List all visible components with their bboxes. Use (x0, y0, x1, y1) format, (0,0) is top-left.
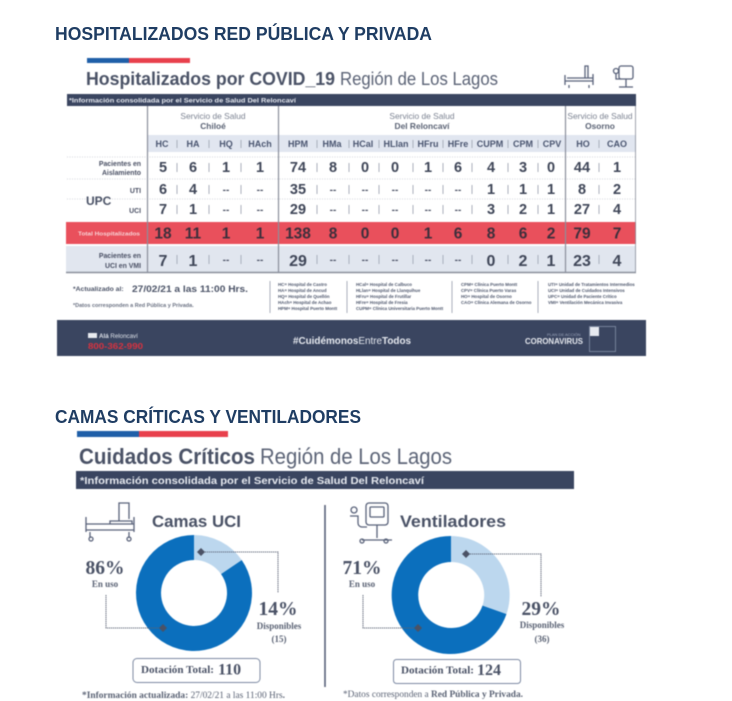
panel subtitle: Región de Los Lagos (260, 444, 452, 469)
legend: units (548, 282, 635, 305)
legend: clinics: CPM= Clínica Puerto Montt (461, 282, 518, 287)
panel subtitle: Región de Los Lagos (340, 68, 498, 89)
header band: HQ (219, 139, 233, 149)
vmi band: UCI en VMI (105, 263, 141, 270)
row: aislamiento values: 1 (613, 160, 621, 176)
total band (66, 222, 636, 244)
legend: units: UCI= Unidad de Cuidados Intensivos (548, 288, 625, 293)
column group headers: Servicio de Salud (180, 111, 246, 121)
legend: hospitals 2 (356, 282, 444, 311)
heading: camas UCI: Camas UCI (152, 512, 241, 531)
legend: hospitals 1: HPM= Hospital Puerto Montt (278, 306, 338, 311)
header band: HC (156, 139, 169, 149)
callout: 29% disponibles: (36) (534, 634, 550, 644)
footer band: 800-362-990 (88, 341, 143, 351)
legend: hospitals 2: CUPM= Clínica Universitaria Puerto Montt (356, 306, 444, 311)
row: VMI values: -- (425, 255, 431, 266)
row: UCI values: 4 (613, 202, 621, 218)
callout: 86% en uso (86, 558, 167, 632)
header band: CUPM (477, 139, 503, 149)
row: aislamiento values: 6 (454, 160, 462, 176)
row: UCI values: 1 (189, 202, 197, 218)
column separators (177, 140, 599, 264)
header band: CPV (543, 139, 561, 149)
vmi band: Pacientes en (99, 253, 141, 260)
callout: 14% disponibles: Disponibles (257, 621, 302, 631)
row labels (86, 161, 141, 215)
row: VMI values: 23 (573, 253, 591, 270)
total box: ventiladores: Dotación Total: (401, 664, 474, 676)
heading: hospitalizados: HOSPITALIZADOS RED PÚBLICA Y PRIVADA (55, 23, 432, 44)
row: aislamiento values: 8 (329, 160, 337, 176)
flag stripe (87, 58, 190, 63)
legend: clinics: CPV= Clínica Puerto Varas (461, 288, 517, 293)
info bar: *Información consolidada por el Servicio de Salud Del Reloncaví (80, 476, 425, 487)
legend: clinics: CAO= Clínica Alemana de Osorno (461, 300, 532, 305)
legend: hospitals 1: HQ= Hospital de Quellón (278, 294, 330, 299)
row: aislamiento values: 4 (487, 160, 495, 176)
legend: clinics (461, 282, 532, 305)
callout: 86% en uso: En uso (92, 579, 119, 589)
heading: camas criticas: CAMAS CRÍTICAS Y VENTILADORES (55, 406, 361, 427)
header band: HO (576, 139, 590, 149)
row: VMI values: -- (392, 255, 398, 266)
row: aislamiento values: 0 (391, 160, 399, 176)
footnote: actualizada: *Información actualizada: 27/02/21 a las 11:00 Hrs . (82, 690, 285, 700)
update note (73, 284, 248, 309)
update note: *Datos corresponden a Red Pública y Privada. (73, 303, 194, 309)
total band: Total Hospitalizados (78, 232, 140, 238)
legend: hospitals 1: HC= Hospital de Castro (278, 282, 327, 287)
row: aislamiento values: 6 (189, 160, 197, 176)
footer band: #CuidémonosEntreTodos (293, 336, 411, 347)
header band (148, 135, 636, 152)
legend: hospitals 1: HA= Hospital de Ancud (278, 288, 327, 293)
update note: 27/02/21 a las 11:00 Hrs. (132, 284, 248, 294)
row separators (67, 157, 636, 199)
footnote: datos: *Datos corresponden a Red Pública y Privada. (343, 689, 523, 699)
divider (324, 505, 326, 687)
legend: units: VMI= Ventilación Mecánica Invasiva (548, 300, 623, 305)
callout: 29% disponibles: Disponibles (520, 620, 565, 630)
donut chart: ventiladores (392, 536, 510, 654)
row: total values: 6 (454, 226, 463, 242)
footer band: PLAN DE ACCIÓN (547, 332, 581, 337)
row: UTI values: -- (455, 185, 461, 196)
row labels: UCI (129, 208, 141, 215)
legend: clinics: HO= Hospital de Osorno (461, 294, 512, 299)
header band: CAO (607, 139, 627, 149)
column group headers (180, 111, 633, 131)
row: VMI values: 29 (289, 253, 307, 270)
icon: ventilator (614, 66, 633, 87)
legend: hospitals 2: HFru= Hospital de Frutillar (356, 294, 412, 299)
callout: 14% disponibles: 14% (258, 599, 298, 620)
footer band (57, 320, 646, 356)
callout: 71% en uso: 71% (342, 558, 382, 579)
row: UTI values: 8 (578, 182, 586, 198)
footer band: Alá Reloncaví (99, 333, 138, 340)
row: total values: 8 (487, 226, 496, 242)
row: UCI values: -- (362, 205, 368, 216)
row: VMI values (159, 253, 622, 270)
header band: HPM (288, 139, 308, 149)
row: aislamiento values: 1 (256, 160, 264, 176)
row: VMI values: 1 (189, 253, 198, 270)
row: UTI values: 1 (547, 182, 555, 198)
row: aislamiento values: 44 (574, 160, 590, 176)
total box: camas (133, 658, 260, 682)
total box: camas: 110 (218, 662, 241, 678)
column group headers: Osorno (585, 121, 615, 131)
info bar (76, 471, 574, 489)
row: UCI values: 7 (159, 202, 167, 218)
callout: 14% disponibles (197, 548, 302, 644)
row: VMI values: 2 (519, 253, 528, 270)
row: aislamiento values: 0 (547, 160, 555, 176)
row: UCI values: 27 (574, 202, 590, 218)
row: VMI values: 4 (613, 253, 622, 270)
row: UCI values: 2 (519, 202, 527, 218)
row: UCI values: -- (392, 205, 398, 216)
header band: HCal (353, 139, 373, 149)
row: total values: 1 (222, 226, 231, 242)
callout: 29% disponibles: 29% (522, 599, 560, 620)
column group headers: Del Reloncaví (395, 121, 450, 131)
row: UCI values: 3 (487, 202, 495, 218)
row: UTI values: -- (362, 185, 368, 196)
row: total values: 0 (361, 226, 369, 242)
row: total values: 1 (256, 226, 265, 242)
header band: HLlan (383, 139, 409, 149)
callout: 71% en uso (342, 558, 422, 632)
row: VMI values: -- (362, 255, 368, 266)
row: aislamiento values: 5 (159, 160, 167, 176)
row: VMI values: -- (223, 255, 229, 266)
column group headers: Servicio de Salud (567, 111, 633, 121)
legend: hospitals 1: HAch= Hospital de Achao (278, 300, 332, 305)
row: UTI values: 2 (613, 182, 621, 198)
update note: *Actualizado al: (73, 286, 124, 293)
legend: hospitals 1 (278, 282, 338, 311)
row: aislamiento values: 1 (222, 160, 230, 176)
heading: ventiladores: Ventiladores (400, 512, 506, 531)
callout: 29% disponibles (462, 550, 565, 644)
callout: 14% disponibles: (15) (272, 634, 286, 644)
panel title: Cuidados Críticos (79, 444, 255, 469)
row: UTI values: -- (223, 185, 229, 196)
row: total values: 8 (329, 226, 338, 242)
row: UCI values: -- (330, 205, 336, 216)
row: UCI values: 29 (290, 202, 306, 218)
row: UTI values (159, 182, 621, 198)
vmi band (66, 246, 636, 272)
header band: HFre (448, 139, 468, 149)
legend: hospitals 2: HFre= Hospital de Fresia (356, 300, 408, 305)
flag stripe (77, 431, 228, 437)
legend: units: UPC= Unidad de Paciente Crítico (548, 294, 617, 299)
row: UTI values: -- (330, 185, 336, 196)
row: total values: 11 (185, 226, 202, 242)
row: UTI values: 1 (487, 182, 495, 198)
column group headers: Servicio de Salud (389, 111, 455, 121)
row: aislamiento values: 74 (290, 160, 306, 176)
row labels: Aislamiento (102, 170, 141, 177)
row: UCI values: 1 (547, 202, 555, 218)
row: UTI values: -- (425, 185, 431, 196)
header band: CPM (513, 139, 533, 149)
icon: ventilator (350, 503, 392, 543)
legend: hospitals 2: HCal= Hospital de Calbuco (356, 282, 412, 287)
row: VMI values: 7 (159, 253, 168, 270)
row: aislamiento values: 0 (361, 160, 369, 176)
info bar (67, 94, 636, 106)
callout: 71% en uso: En uso (349, 579, 376, 589)
panel: hospitalizados table infographic (57, 58, 646, 356)
row: VMI values: 1 (547, 253, 556, 270)
row: aislamiento values (159, 160, 621, 176)
total box: ventiladores: 124 (477, 662, 501, 679)
row: total values: 1 (424, 226, 433, 242)
row: UTI values: 4 (189, 182, 197, 198)
row: UCI values: -- (257, 205, 263, 216)
row: UTI values: 1 (519, 182, 527, 198)
row: UTI values: 6 (159, 182, 167, 198)
row: UCI values: -- (223, 205, 229, 216)
row: UCI values: -- (455, 205, 461, 216)
row: total values: 2 (547, 226, 555, 242)
icon: bed (565, 66, 593, 88)
donut chart: camas UCI (136, 535, 252, 651)
table rules (66, 106, 636, 272)
legend: hospitals 2: HLlan= Hospital de Llanquihue (356, 288, 421, 293)
row: total values: 6 (519, 226, 528, 242)
row labels: UPC (86, 194, 112, 208)
total box: ventiladores (394, 660, 520, 684)
legend separators (270, 281, 538, 313)
row labels: UTI (130, 188, 141, 195)
panel: cuidados criticos (76, 431, 574, 700)
row: UCI values (159, 202, 621, 218)
row: total values: 138 (285, 226, 311, 242)
header band: HFru (418, 139, 438, 149)
row labels: Pacientes en (99, 161, 141, 168)
row: UCI values: -- (425, 205, 431, 216)
row: aislamiento values: 3 (519, 160, 527, 176)
info bar: *Información consolidada por el Servicio de Salud Del Reloncaví (69, 98, 296, 104)
row: total values: 7 (613, 226, 621, 242)
row: VMI values: -- (455, 255, 461, 266)
header band: HMa (322, 139, 342, 149)
icon: ICU bed (86, 503, 134, 541)
header band: HA (186, 139, 200, 149)
total box: camas: Dotación Total: (141, 664, 214, 676)
row: UTI values: -- (392, 185, 398, 196)
row: VMI values: 0 (487, 253, 496, 270)
footer band: CORONAVIRUS (525, 336, 583, 346)
header band: HAch (248, 139, 272, 149)
row: UTI values: -- (257, 185, 263, 196)
row: aislamiento values: 1 (424, 160, 432, 176)
row: total values: 18 (154, 226, 172, 242)
legend: units: UTI= Unidad de Tratamientos Intermedios (548, 282, 635, 287)
panel title: Hospitalizados por COVID_19 (86, 68, 335, 89)
row: UTI values: 35 (290, 182, 306, 198)
row: total values (154, 226, 621, 242)
row: total values: 0 (391, 226, 399, 242)
row: VMI values: -- (330, 255, 336, 266)
column group headers: Chiloé (200, 121, 226, 131)
row: total values: 79 (573, 226, 591, 242)
callout: 86% en uso: 86% (86, 558, 124, 579)
row: VMI values: -- (257, 255, 263, 266)
